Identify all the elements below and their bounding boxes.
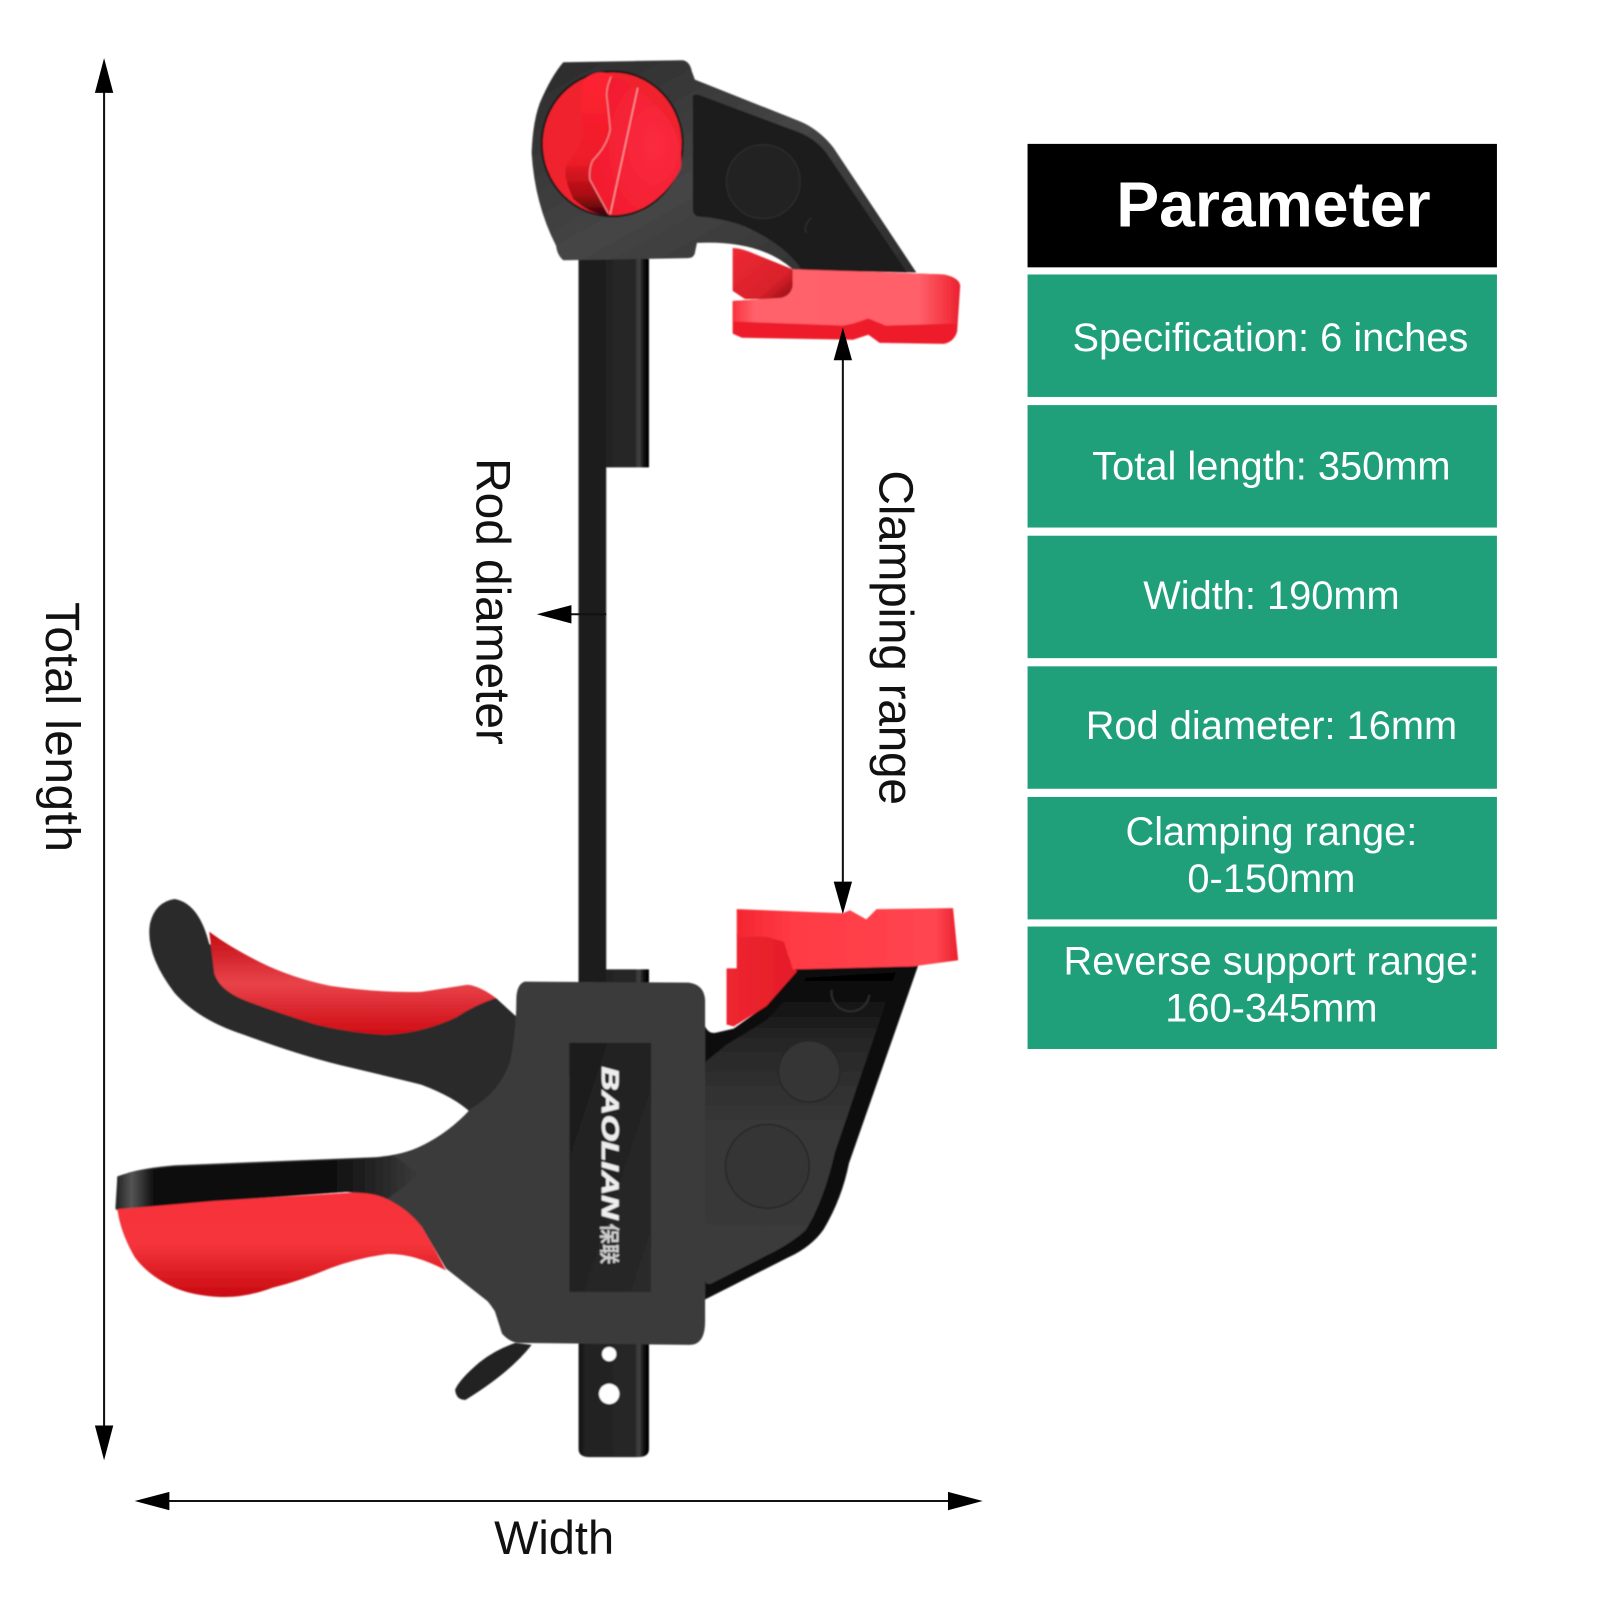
label: width: Width <box>494 1512 614 1564</box>
red knob <box>542 71 683 216</box>
top arm recess <box>693 94 907 272</box>
label: total length: Total length <box>35 602 88 852</box>
top red jaw <box>733 248 960 344</box>
row: total length: Total length: 350mm <box>1092 445 1451 489</box>
row: rod diameter <box>1028 666 1497 789</box>
slide body <box>434 982 705 1345</box>
row: specification: Specification: 6 inches <box>1072 316 1468 360</box>
brand plate <box>569 1043 651 1292</box>
heading: Parameter <box>1028 144 1497 267</box>
row: width <box>1028 536 1497 658</box>
product illustration: quick clamp <box>115 60 960 1457</box>
trigger lever <box>455 1343 532 1400</box>
bottom arm <box>702 959 920 1301</box>
row: clamping range <box>1028 797 1497 919</box>
lower handle <box>115 1102 531 1303</box>
row: width: Width: 190mm <box>1143 574 1400 618</box>
lower handle red grip <box>117 1193 446 1297</box>
upper handle <box>149 899 520 1112</box>
row: specification <box>1028 274 1497 397</box>
row: reverse support range: Reverse support range: <box>1064 939 1479 983</box>
bottom red jaw <box>727 908 958 1027</box>
dimension: clamping range arrow <box>834 328 852 914</box>
dimension: width arrow <box>135 1492 983 1510</box>
brand name in Chinese: 保联 <box>597 1223 620 1264</box>
row: total length <box>1028 405 1497 528</box>
label: rod diameter: Rod diameter <box>466 458 519 745</box>
panel: parameter table <box>1028 144 1497 1049</box>
row: reverse support range: 160-345mm <box>1165 986 1378 1030</box>
dimension: total length arrow <box>95 58 113 1460</box>
row: clamping range: 0-150mm <box>1187 857 1355 901</box>
row: rod diameter: Rod diameter: 16mm <box>1086 704 1457 748</box>
lower handle black band <box>116 1155 418 1210</box>
dimension: rod diameter arrow <box>537 605 606 623</box>
label: clamping range: Clamping range <box>869 470 922 805</box>
top head with red knob <box>532 60 916 272</box>
row: clamping range: Clamping range: <box>1125 810 1417 854</box>
clamp bar <box>579 250 649 1457</box>
row: reverse support range <box>1028 927 1497 1049</box>
heading: Parameter: Parameter <box>1116 169 1431 241</box>
brand name: BAOLIAN <box>596 1066 623 1221</box>
upper handle red grip <box>209 932 496 1035</box>
